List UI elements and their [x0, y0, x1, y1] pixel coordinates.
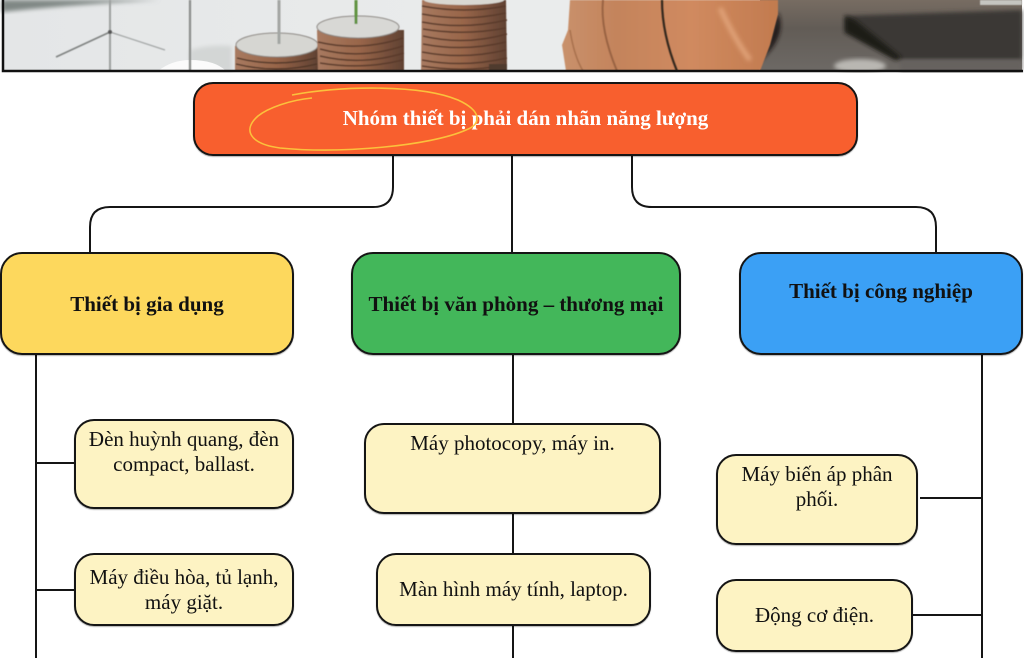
item: air conditioner, fridge, washer: máy giặt. — [145, 590, 223, 614]
item: electric motor: Động cơ điện. — [755, 603, 874, 627]
item: monitor and laptop — [376, 553, 651, 626]
left dark band — [2, 0, 160, 12]
photo banner: coins, wind turbines and hand — [0, 0, 1024, 73]
item: distribution transformer — [716, 454, 918, 545]
item: air conditioner, fridge, washer — [74, 553, 294, 626]
item: distribution transformer: Máy biến áp phân — [741, 462, 893, 486]
category: household appliances — [0, 252, 294, 355]
category: industrial equipment — [739, 252, 1023, 355]
item: fluorescent lamps: Đèn huỳnh quang, đèn — [89, 427, 279, 451]
category: household appliances: Thiết bị gia dụng — [70, 292, 224, 316]
hand — [562, 0, 778, 71]
item: air conditioner, fridge, washer: Máy điều hòa, tủ lạnh, — [90, 564, 278, 588]
coin stack 2 — [317, 30, 404, 71]
category: office and commercial equipment: Thiết bị văn phòng – thương mại — [368, 292, 663, 316]
item: fluorescent lamps: compact, ballast. — [113, 452, 255, 476]
category: office and commercial equipment — [351, 252, 681, 355]
coin stack 3 — [421, 0, 507, 71]
item: photocopier and printer — [364, 423, 661, 514]
item: monitor and laptop: Màn hình máy tính, laptop. — [399, 577, 628, 601]
item: photocopier and printer: Máy photocopy, máy in. — [410, 431, 615, 455]
item: electric motor — [716, 579, 913, 652]
background right — [760, 0, 1022, 71]
coin stack 1 — [235, 46, 318, 71]
item: distribution transformer: phối. — [796, 486, 838, 510]
item: fluorescent lamps — [74, 419, 294, 509]
hand-drawn highlight ellipse — [249, 87, 478, 151]
title box: Nhóm thiết bị phải dán nhãn năng lượng — [343, 106, 708, 130]
category: industrial equipment: Thiết bị công nghiệp — [789, 279, 973, 303]
title box — [193, 82, 858, 156]
